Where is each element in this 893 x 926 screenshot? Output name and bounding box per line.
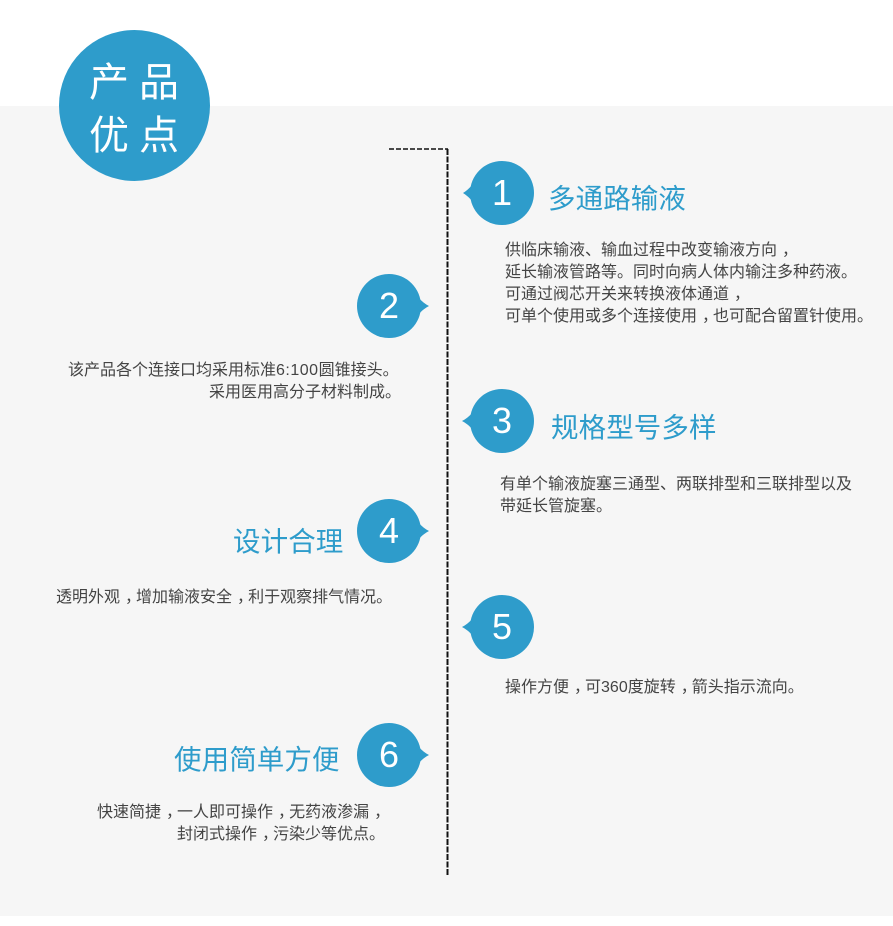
- number badge 4: 4: [379, 510, 399, 551]
- text block 6: 快速简捷 ，一人即可操作 ，无药液渗漏 ，: [97, 804, 390, 821]
- text block 3: [500, 475, 852, 515]
- text block 1: [505, 241, 873, 325]
- number badge 1: [463, 161, 534, 225]
- heading: various specifications: 规格型号多样: [551, 412, 717, 443]
- number badge 3: 3: [492, 400, 512, 441]
- badge: product advantages: 产: [89, 50, 129, 108]
- text block 4: 透明外观 ，增加输液安全 ，利于观察排气情况。: [56, 589, 392, 606]
- number badge 5: 5: [492, 606, 512, 647]
- text block 6: 封闭式操作 ，污染少等优点。: [177, 826, 385, 843]
- text block 1: 延长输液管路等。同时向病人体内输注多种药液。: [505, 264, 857, 281]
- timeline dashed line: [389, 149, 448, 875]
- number badge 3: [462, 389, 534, 453]
- text block 2: 采用医用高分子材料制成。: [209, 384, 401, 401]
- heading: reasonable design: 设计合理: [233, 526, 343, 557]
- badge: product advantages: 优: [89, 103, 129, 161]
- number badge 2: [357, 274, 429, 338]
- text block 1: 供临床输液、输血过程中改变输液方向 ，: [505, 242, 798, 259]
- badge: product advantages: 品: [139, 50, 179, 108]
- text block 2: 该产品各个连接口均采用标准6:100圆锥接头。: [68, 362, 399, 379]
- number badge 5: [462, 595, 534, 659]
- number badge 1: 1: [492, 172, 512, 213]
- number badge 4: [357, 499, 429, 563]
- text block 3: 有单个输液旋塞三通型、两联排型和三联排型以及: [500, 476, 852, 493]
- number badge 2: 2: [379, 285, 399, 326]
- number badge 6: 6: [379, 734, 399, 775]
- text block 2: [68, 361, 401, 401]
- text block 6: [97, 803, 390, 843]
- heading: multi-channel infusion: 多通路输液: [548, 183, 686, 214]
- text block 3: 带延长管旋塞。: [500, 498, 612, 515]
- badge: product advantages: 点: [139, 103, 179, 161]
- badge: product advantages: [59, 30, 210, 181]
- text block 5: 操作方便 ，可360度旋转 ，箭头指示流向。: [505, 679, 804, 696]
- text block 1: 可单个使用或多个连接使用 ，也可配合留置针使用。: [505, 308, 873, 325]
- heading: simple and convenient: 使用简单方便: [174, 744, 340, 775]
- text block 1: 可通过阀芯开关来转换液体通道 ，: [505, 286, 750, 303]
- number badge 6: [357, 723, 429, 787]
